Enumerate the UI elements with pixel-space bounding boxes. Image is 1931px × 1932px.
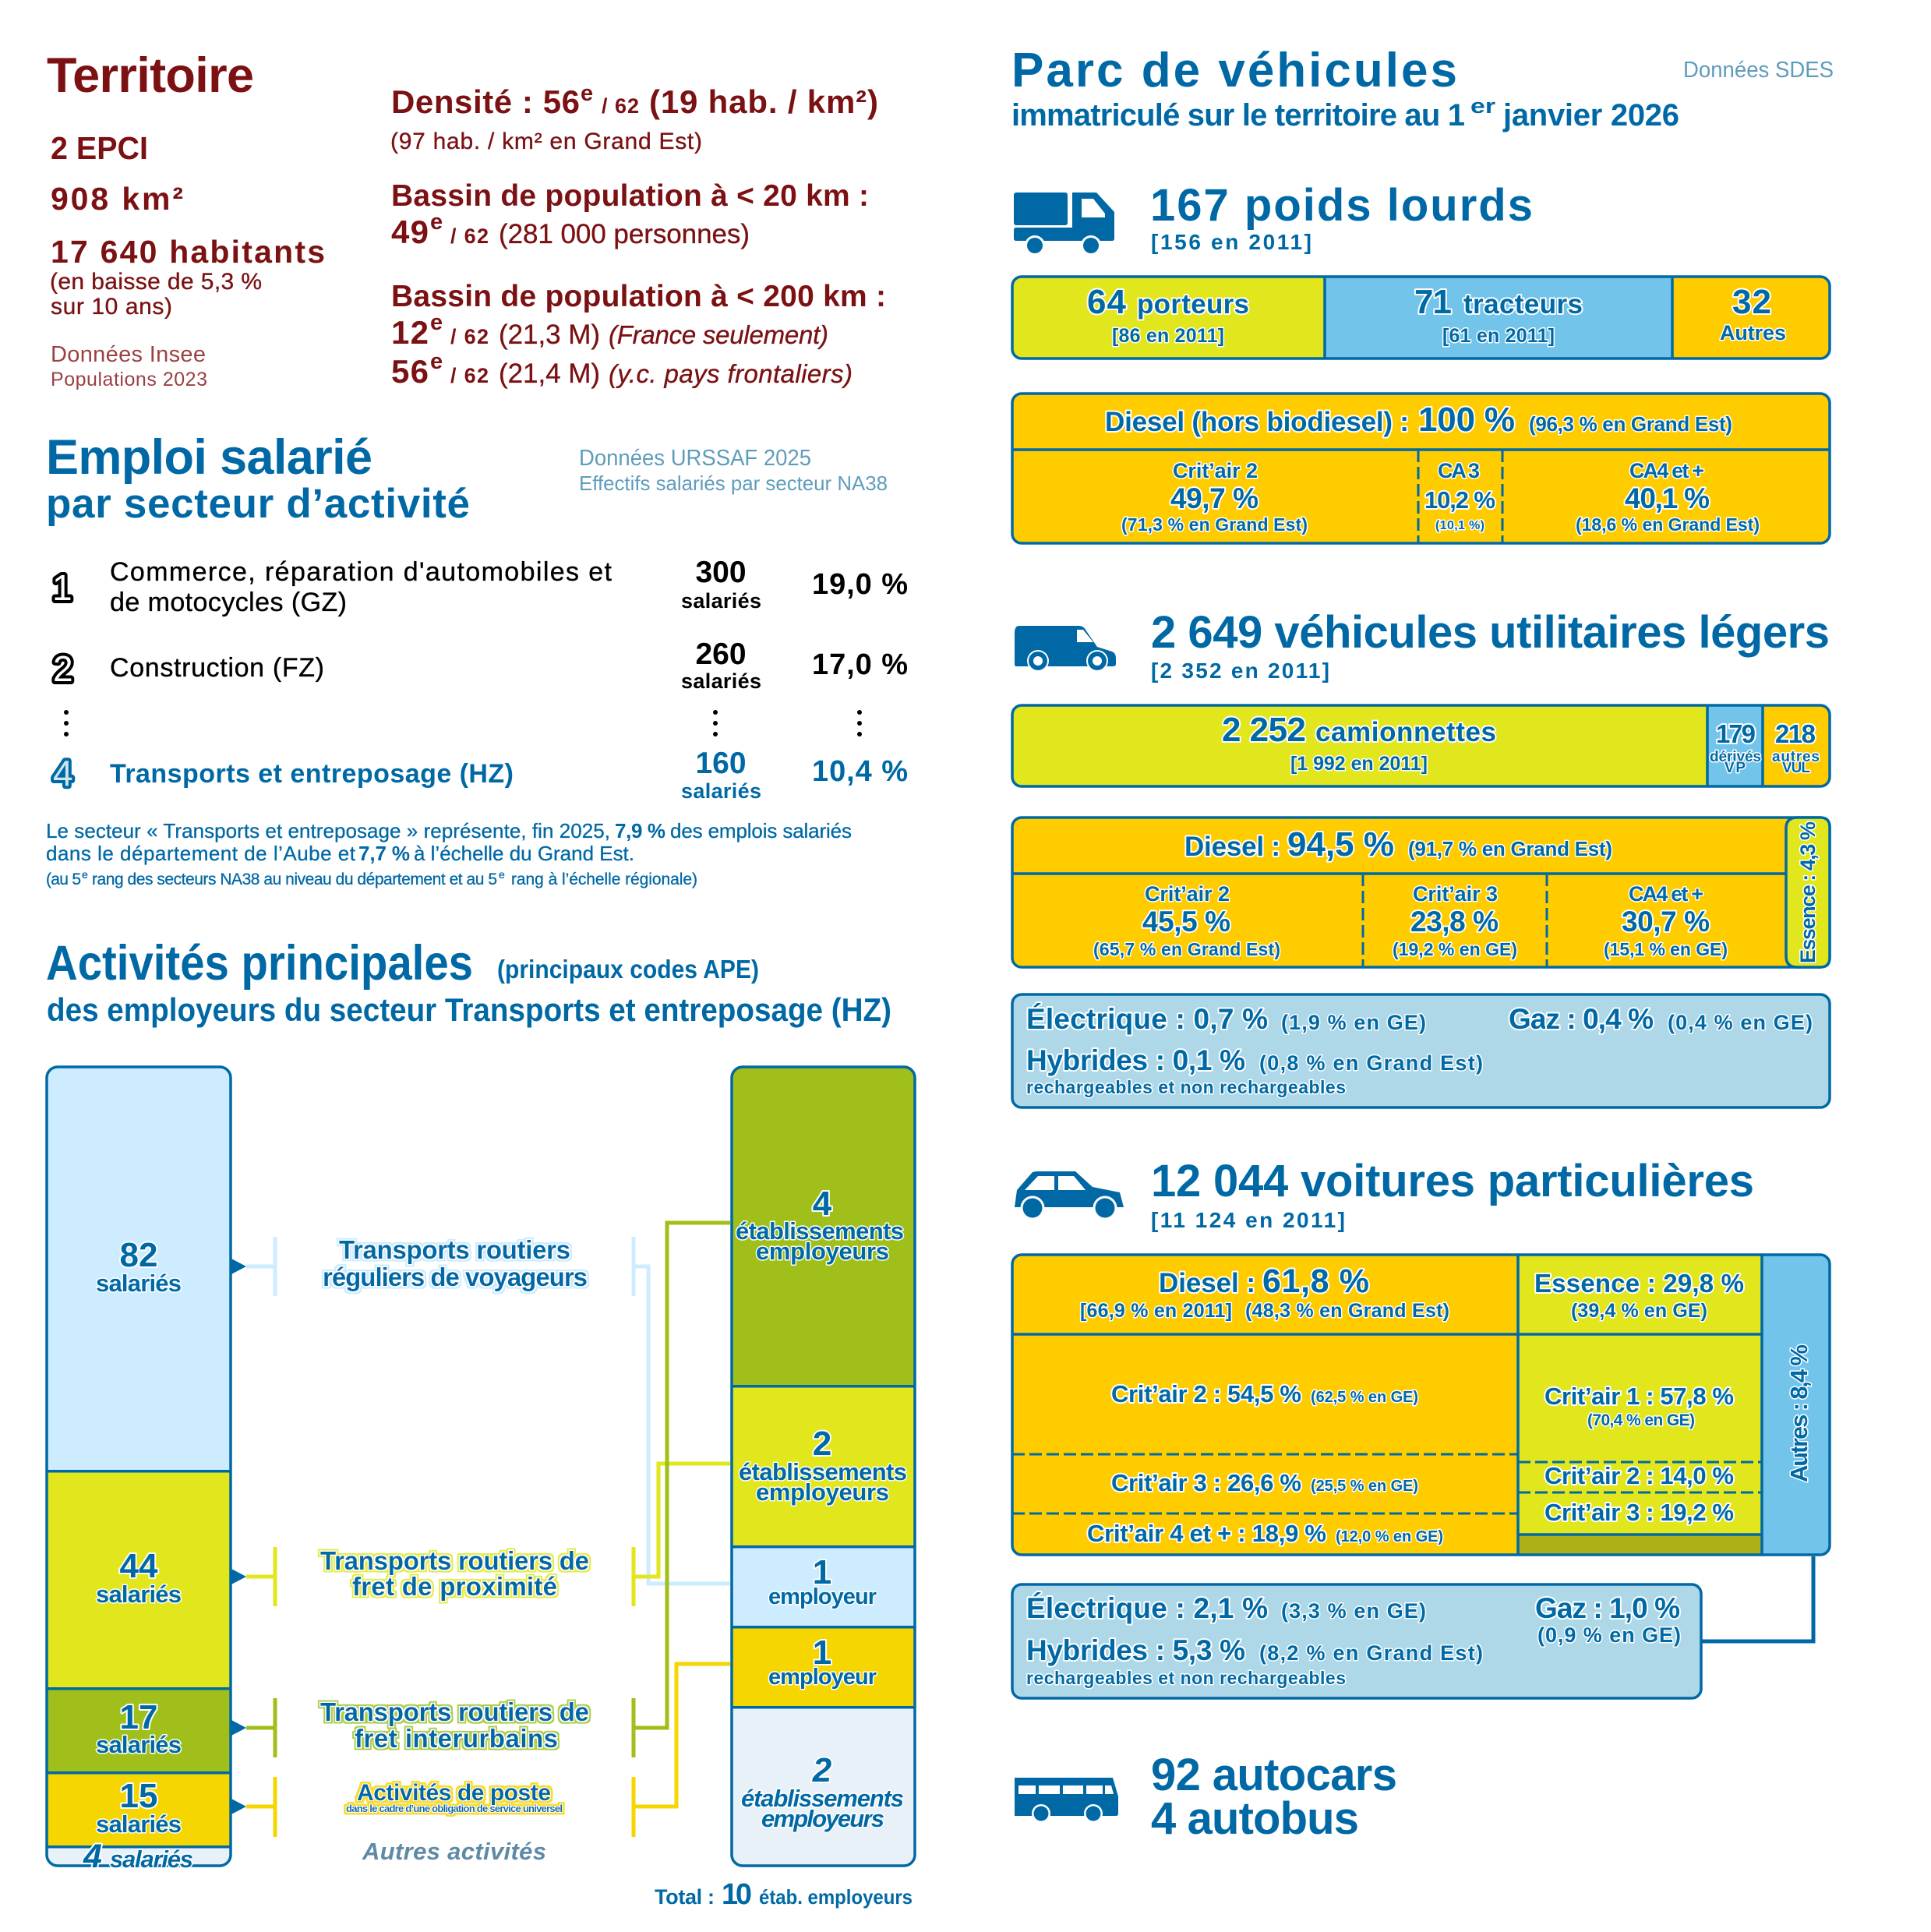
label: diesel: 94,5 % <box>1287 825 1394 864</box>
heading: emploi salarié <box>46 430 470 527</box>
label: diesel crit'air 4: Crit’air 4 et + : 18,9 % <box>1087 1520 1326 1547</box>
stat: bassin 20 km: e <box>430 210 443 235</box>
label: gaz <box>1535 1592 1681 1647</box>
label: camionnettes: [1 992 en 2011] <box>1290 753 1428 775</box>
heading: activités principales: des employeurs du secteur Transports et entreposage (HZ) <box>47 991 891 1028</box>
label: diesel crit'air 2: Crit’air 2 : 54,5 % <box>1111 1380 1301 1407</box>
label: crit'air 2 <box>1121 459 1308 535</box>
icon: poids lourd <box>1014 192 1114 256</box>
label: diesel crit'air 4: (12,0 % en GE) <box>1336 1528 1443 1545</box>
stat: surface: 908 km² <box>51 181 183 217</box>
label: gaz: Gaz : 1,0 % <box>1535 1592 1680 1624</box>
label: crit'air 2: (71,3 % en Grand Est) <box>1121 514 1308 535</box>
label: crit'air 3 <box>1393 882 1517 959</box>
label: essence crit'air 1: Crit’air 1 : 57,8 % <box>1544 1383 1734 1410</box>
label: hybrides: (8,2 % en Grand Est) <box>1259 1641 1483 1665</box>
label: dérivés VP: VP <box>1724 760 1746 776</box>
label: 2 autres: établissements <box>741 1785 904 1812</box>
stat: bassin 20 km <box>391 179 869 250</box>
label: autres: 32 <box>1732 283 1771 321</box>
panel: autres énergies voitures <box>1012 1584 1701 1698</box>
label: CA4 et +: 30,7 % <box>1622 906 1710 938</box>
stat: densité: e <box>581 81 593 106</box>
heading: autocars et autobus: 92 autocars <box>1151 1750 1397 1800</box>
text: baisse de population: sur 10 ans) <box>51 294 172 320</box>
text: baisse de population <box>50 269 262 320</box>
row: rang 4: 10,4 % <box>812 755 908 788</box>
label: hybrides: rechargeables et non rechargeables <box>1026 1077 1346 1097</box>
heading: autocars et autobus: 4 autobus <box>1151 1793 1359 1844</box>
stat: bassin 200 km: e <box>430 310 443 335</box>
label: crit'air 3: (19,2 % en GE) <box>1393 939 1517 959</box>
heading: parc de véhicules: er <box>1470 94 1496 118</box>
label: diesel: (91,7 % en Grand Est) <box>1408 837 1612 860</box>
label: diesel: Diesel : <box>1159 1268 1255 1298</box>
panel: territoire <box>47 48 886 390</box>
text: commentaire secteur: 7,7 % <box>358 842 410 865</box>
label: crit'air 2: Crit’air 2 <box>1173 459 1258 482</box>
heading: utilitaires <box>1151 607 1830 683</box>
panel: emploi salarié <box>46 430 908 888</box>
label: 44 salariés <box>96 1547 182 1608</box>
label: CA4 et +: CA4 et + <box>1629 459 1704 482</box>
total: établissements: étab. employeurs <box>759 1885 913 1909</box>
row: rang 2: salariés <box>681 669 761 693</box>
label: 2 autres: employeurs <box>761 1805 884 1832</box>
label: porteurs <box>1087 283 1249 347</box>
label: 1 employeur: employeur <box>768 1584 877 1609</box>
label: électrique: (3,3 % en GE) <box>1281 1599 1426 1623</box>
row: rang 1: 300 <box>695 556 747 589</box>
stat: EPCI: 2 EPCI <box>51 130 148 166</box>
text: commentaire secteur: à l’échelle du Grand Est. <box>414 842 634 865</box>
label: poste: Activités de poste <box>357 1780 551 1806</box>
segment: essence: Essence : 4,3 % <box>1796 821 1820 963</box>
text: commentaire secteur: rang des secteurs NA38 au niveau du département et au 5 <box>92 871 497 888</box>
source: Insee: Données Insee <box>51 342 206 367</box>
label: crit'air 2 <box>1093 882 1280 959</box>
heading: poids lourds: [156 en 2011] <box>1151 230 1311 254</box>
labels: activités <box>320 1235 589 1865</box>
label: électrique <box>1026 1003 1426 1035</box>
label: CA4 et +: CA4 et + <box>1629 882 1703 906</box>
label: voyageurs: Transports routiers <box>339 1235 570 1264</box>
icon: voiture <box>1015 1171 1124 1220</box>
label: CA4 et + <box>1604 882 1728 959</box>
text: commentaire secteur: (au 5 <box>46 871 81 888</box>
label: diesel <box>1080 1263 1449 1322</box>
row: rang 2: 260 <box>695 638 747 671</box>
label: 1 employeur poste <box>768 1634 877 1690</box>
source: URSSAF: Effectifs salariés par secteur NA38 <box>579 472 888 495</box>
heading: parc de véhicules <box>1011 44 1679 132</box>
label: camionnettes: camionnettes <box>1315 717 1496 747</box>
panel: motorisation poids lourds <box>1012 394 1830 543</box>
label: 17 salariés: salariés <box>96 1731 182 1758</box>
label: CA 3 <box>1424 459 1495 532</box>
stat: densité <box>390 81 878 154</box>
label: camionnettes: 2 252 <box>1222 711 1306 749</box>
label: hybrides <box>1026 1634 1483 1688</box>
label: hybrides: rechargeables et non rechargeables <box>1026 1668 1346 1688</box>
source: URSSAF <box>579 446 888 495</box>
heading: parc de véhicules: immatriculé sur le territoire au 1 <box>1011 98 1465 132</box>
label: porteurs: 64 <box>1087 283 1127 321</box>
row: rang 4: salariés <box>681 779 761 803</box>
source: SDES: Données SDES <box>1683 58 1834 83</box>
segment: essence <box>1786 818 1830 967</box>
label: autres <box>1720 283 1786 344</box>
stat: densité: Densité : 56 <box>391 83 580 120</box>
heading: voitures: [11 124 en 2011] <box>1151 1208 1345 1232</box>
stat: densité: (97 hab. / km² en Grand Est) <box>390 129 702 154</box>
heading: activités principales <box>46 936 891 1028</box>
stat: bassin 200 km <box>391 280 886 390</box>
connector: interurbains <box>246 1223 730 1757</box>
label: interurbains: Transports routiers de <box>320 1697 589 1726</box>
total: établissements: 10 <box>722 1878 752 1911</box>
label: CA4 et +: 40,1 % <box>1625 482 1710 514</box>
label: 17 salariés <box>96 1698 182 1758</box>
label: dérivés VP <box>1710 719 1761 776</box>
label: crit'air 3: 23,8 % <box>1410 906 1499 938</box>
label: 4 salariés: 4 <box>83 1838 102 1875</box>
label: autres: Autres : 8,4 % <box>1785 1344 1813 1482</box>
label: diesel: Diesel : <box>1184 832 1280 862</box>
label: autres VUL: 218 <box>1775 719 1816 748</box>
label: voyageurs: réguliers de voyageurs <box>323 1263 588 1291</box>
row: rang 4: 4 <box>53 753 73 793</box>
label: diesel crit'air 3: (25,5 % en GE) <box>1311 1478 1418 1495</box>
label: électrique <box>1026 1592 1426 1624</box>
label: 15 salariés: salariés <box>96 1810 182 1838</box>
label: essence: Essence : 29,8 % <box>1534 1269 1744 1298</box>
label: 2 établissements: employeurs <box>756 1478 889 1506</box>
connector: autres énergies <box>1701 1556 1813 1641</box>
label: 1 employeur poste: employeur <box>768 1665 877 1690</box>
stat: bassin 200 km: (21,3 M) <box>499 320 600 350</box>
label: poste <box>346 1780 563 1814</box>
label: voyageurs <box>323 1235 588 1291</box>
label: électrique: Électrique : 2,1 % <box>1026 1592 1268 1624</box>
panel: répartition utilitaires <box>1011 704 1833 788</box>
label: 17 salariés: 17 <box>120 1698 157 1736</box>
stat: bassin 200 km: (21,4 M) <box>499 358 600 389</box>
stat: bassin 20 km: 49 <box>391 214 429 250</box>
label: 44 salariés: salariés <box>96 1581 182 1608</box>
heading: emploi salarié: par secteur d’activité <box>46 481 470 527</box>
label: proximité: Transports routiers de <box>320 1546 589 1575</box>
label: 4 établissements: 4 <box>813 1185 832 1223</box>
stat: bassin 200 km: Bassin de population à < 200 km : <box>391 280 886 313</box>
connector: voyageurs <box>246 1237 730 1584</box>
label: dérivés VP: 179 <box>1716 719 1756 748</box>
title: Territoire: Territoire <box>47 48 254 103</box>
row: rang 1 <box>52 556 908 617</box>
text: commentaire secteur: e <box>82 868 88 881</box>
label: diesel: 100 % <box>1418 401 1515 439</box>
panel: motorisation utilitaires <box>1012 818 1830 967</box>
heading: activités principales: (principaux codes APE) <box>497 955 759 984</box>
stat: bassin 200 km: (France seulement) <box>609 320 828 349</box>
heading: parc de véhicules: janvier 2026 <box>1502 98 1679 132</box>
label: 1 employeur: 1 <box>813 1553 831 1591</box>
label: essence crit'air 1: (70,4 % en GE) <box>1587 1411 1695 1429</box>
row: rang 2: 2 <box>53 648 73 689</box>
label: gaz: (0,9 % en GE) <box>1537 1623 1681 1647</box>
label: gaz <box>1509 1003 1813 1035</box>
label: 82 salariés <box>96 1236 182 1297</box>
panel: motorisation voitures <box>1011 1253 1833 1556</box>
text: commentaire secteur: des emplois salariés <box>670 819 852 842</box>
text: commentaire secteur: e <box>499 868 505 881</box>
stat: bassin 200 km: e <box>430 349 443 374</box>
label: diesel crit'air 2 <box>1111 1380 1418 1407</box>
label: 4 salariés: salariés <box>110 1845 193 1873</box>
label: 82 salariés: 82 <box>120 1236 157 1274</box>
heading: voitures: 12 044 voitures particulières <box>1151 1156 1754 1206</box>
label: hybrides <box>1026 1044 1483 1097</box>
label: essence: (39,4 % en GE) <box>1571 1300 1707 1322</box>
label: essence crit'air 3: Crit’air 3 : 19,2 % <box>1544 1499 1734 1526</box>
stat: densité: / 62 <box>602 94 639 118</box>
heading: utilitaires: 2 649 véhicules utilitaires légers <box>1151 607 1830 658</box>
text: commentaire secteur: dans le département de l’Aube et <box>46 842 356 865</box>
label: 1 employeur <box>768 1553 877 1609</box>
connectors: activités <box>230 1223 730 1837</box>
label: CA 3: 10,2 % <box>1424 486 1495 514</box>
chart: salariés par activité <box>45 1065 232 1875</box>
label: crit'air 3: Crit’air 3 <box>1413 882 1498 906</box>
panel: autres énergies utilitaires <box>1012 994 1830 1107</box>
label: proximité <box>320 1546 589 1601</box>
chart: établissements employeurs <box>730 1065 917 1867</box>
label: porteurs: porteurs <box>1137 289 1249 320</box>
icon: bus <box>1015 1778 1118 1823</box>
stat: bassin 200 km: / 62 <box>450 364 489 387</box>
heading: poids lourds <box>1150 180 1533 254</box>
label: 4 salariés <box>83 1838 193 1875</box>
row: rang 1: de motocycles (GZ) <box>110 588 347 617</box>
label: diesel crit'air 2: (62,5 % en GE) <box>1311 1389 1418 1406</box>
arrows <box>230 1258 246 1815</box>
dots: rangs intermédiaires <box>64 710 862 736</box>
label: tracteurs: [61 en 2011] <box>1442 325 1555 347</box>
icon: utilitaire <box>1015 626 1116 672</box>
row: rang 4: 160 <box>695 747 747 780</box>
label: crit'air 2: 45,5 % <box>1142 906 1230 938</box>
stat: bassin 200 km: 12 <box>391 314 429 351</box>
label: 44 salariés: 44 <box>120 1547 158 1585</box>
label: 15 salariés <box>96 1777 182 1838</box>
label: autres VUL: VUL <box>1782 760 1810 776</box>
label: 2 établissements <box>739 1425 907 1506</box>
text: commentaire secteur: 7,9 % <box>615 819 665 842</box>
label: diesel: (48,3 % en Grand Est) <box>1245 1300 1449 1322</box>
stat: bassin 200 km: (y.c. pays frontaliers) <box>609 359 853 388</box>
label: 4 établissements: employeurs <box>756 1238 889 1265</box>
text: commentaire secteur: Le secteur « Transports et entreposage » représente, fin 2025, <box>46 819 610 842</box>
label: diesel crit'air 3: Crit’air 3 : 26,6 % <box>1111 1469 1301 1496</box>
label: 2 établissements: établissements <box>739 1458 907 1485</box>
label: diesel <box>1184 825 1612 864</box>
label: tracteurs: tracteurs <box>1463 289 1583 320</box>
label: électrique: (1,9 % en GE) <box>1281 1011 1426 1034</box>
label: CA 3: (10,1 %) <box>1435 519 1484 532</box>
connector: poste <box>246 1664 730 1837</box>
label: CA4 et + <box>1576 459 1760 535</box>
stat: bassin 20 km: Bassin de population à < 20 km : <box>391 179 869 213</box>
stat: densité: (19 hab. / km²) <box>649 83 878 120</box>
label: 2 autres <box>741 1751 904 1832</box>
label: interurbains <box>320 1697 589 1753</box>
connector: proximité <box>246 1464 730 1606</box>
heading: emploi salarié: Emploi salarié <box>46 430 372 485</box>
label: dérivés VP: dérivés <box>1710 749 1761 765</box>
label: autres VUL <box>1772 719 1820 776</box>
total: établissements: Total : <box>655 1885 715 1909</box>
label: 4 établissements: établissements <box>736 1217 904 1245</box>
label: CA4 et +: (18,6 % en Grand Est) <box>1576 514 1760 535</box>
label: crit'air 2: Crit’air 2 <box>1145 882 1230 906</box>
label: autres: Autres activités <box>362 1838 546 1865</box>
label: essence crit'air 2: Crit’air 2 : 14,0 % <box>1544 1462 1734 1489</box>
label: camionnettes <box>1222 711 1496 775</box>
row: rang 2 <box>53 638 908 693</box>
heading: utilitaires: [2 352 en 2011] <box>1151 659 1329 683</box>
stat: bassin 20 km: (281 000 personnes) <box>499 219 750 249</box>
row: rang 1: 1 <box>52 567 72 608</box>
label: diesel: [66,9 % en 2011] <box>1080 1300 1232 1322</box>
label: tracteurs <box>1414 283 1583 347</box>
heading: activités principales: Activités principales <box>46 936 473 991</box>
label: diesel: 61,8 % <box>1262 1263 1369 1300</box>
source: Insee <box>51 342 207 390</box>
label: 4 établissements <box>736 1185 904 1265</box>
label: gaz: (0,4 % en GE) <box>1668 1011 1813 1034</box>
label: diesel: Diesel (hors biodiesel) : <box>1105 407 1409 437</box>
label: autres: Autres <box>1720 321 1786 344</box>
label: porteurs: [86 en 2011] <box>1112 325 1224 347</box>
row: rang 2: 17,0 % <box>812 648 908 681</box>
label: autres VUL: autres <box>1772 749 1820 765</box>
label: 2 établissements: 2 <box>813 1425 831 1463</box>
label: proximité: fret de proximité <box>352 1572 557 1601</box>
label: interurbains: fret interurbains <box>355 1724 558 1753</box>
row: rang 1: 19,0 % <box>812 568 908 601</box>
label: 82 salariés: salariés <box>96 1270 182 1297</box>
label: essence <box>1534 1269 1744 1322</box>
heading: autocars et autobus <box>1151 1750 1397 1844</box>
label: hybrides: (0,8 % en Grand Est) <box>1259 1051 1483 1075</box>
row: rang 1: Commerce, réparation d'automobiles et <box>110 557 612 587</box>
stat: bassin 200 km: / 62 <box>450 325 489 348</box>
panel: répartition poids lourds <box>1011 275 1833 360</box>
label: crit'air 2: 49,7 % <box>1170 482 1259 514</box>
label: 1 employeur poste: 1 <box>813 1634 831 1672</box>
label: diesel <box>1105 401 1732 439</box>
source: URSSAF: Données URSSAF 2025 <box>579 446 811 471</box>
label: tracteurs: 71 <box>1414 283 1452 321</box>
total: établissements <box>655 1878 913 1911</box>
heading: parc de véhicules: Parc de véhicules <box>1011 44 1457 97</box>
text: baisse de population: (en baisse de 5,3 % <box>50 269 262 295</box>
heading: poids lourds: 167 poids lourds <box>1150 180 1533 231</box>
stat: bassin 200 km: 56 <box>391 353 429 390</box>
row: rang 1: salariés <box>681 589 761 613</box>
heading: voitures <box>1151 1156 1754 1232</box>
stat: bassin 20 km: / 62 <box>450 224 489 248</box>
row: rang 2: Construction (FZ) <box>110 653 324 683</box>
text: commentaire secteur <box>46 819 852 888</box>
label: hybrides: Hybrides : 0,1 % <box>1026 1044 1245 1076</box>
row: rang 4 <box>53 747 908 803</box>
label: poste: dans le cadre d’une obligation de service universel <box>346 1803 563 1814</box>
label: diesel crit'air 3 <box>1111 1469 1418 1496</box>
label: essence crit'air 1 <box>1544 1383 1734 1429</box>
label: 2 autres: 2 <box>812 1751 832 1789</box>
label: diesel crit'air 4 <box>1087 1520 1443 1547</box>
label: diesel: (96,3 % en Grand Est) <box>1529 412 1732 436</box>
label: crit'air 2: (65,7 % en Grand Est) <box>1093 939 1280 959</box>
label: gaz: Gaz : 0,4 % <box>1509 1003 1654 1035</box>
source: Insee: Populations 2023 <box>51 369 207 390</box>
label: 15 salariés: 15 <box>120 1777 157 1815</box>
row: rang 4: Transports et entreposage (HZ) <box>110 759 514 789</box>
text: commentaire secteur: rang à l’échelle régionale) <box>511 871 697 888</box>
label: CA4 et +: (15,1 % en GE) <box>1604 939 1728 959</box>
stat: habitants: 17 640 habitants <box>51 234 325 270</box>
label: hybrides: Hybrides : 5,3 % <box>1026 1634 1245 1666</box>
label: électrique: Électrique : 0,7 % <box>1026 1003 1268 1035</box>
label: CA 3: CA 3 <box>1438 459 1480 482</box>
